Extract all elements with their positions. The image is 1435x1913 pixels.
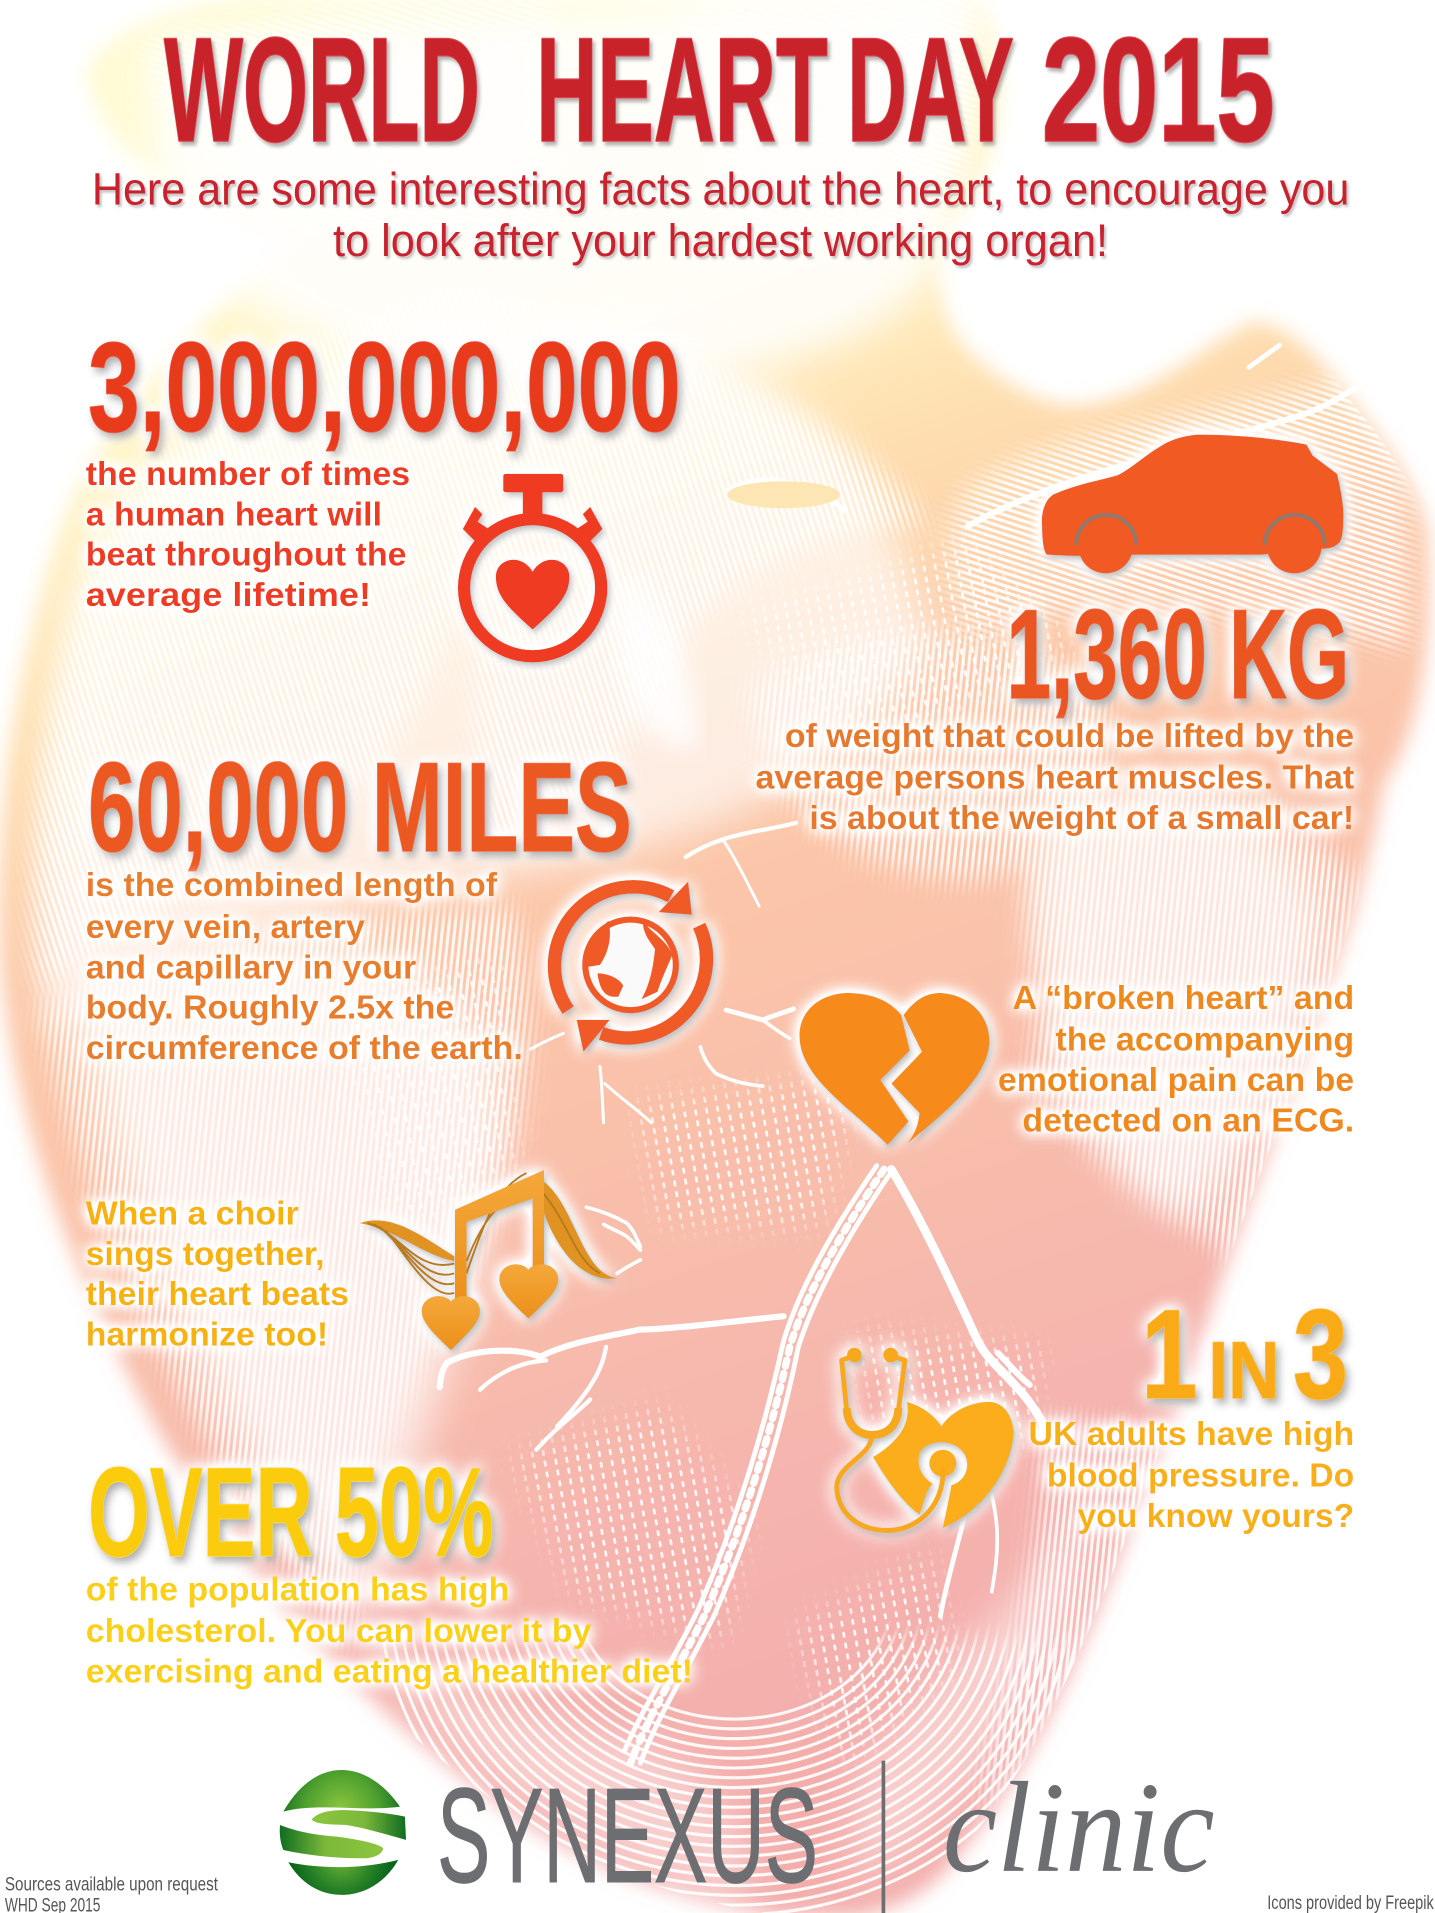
logo: SYNEXUS wordmark: SYNEXUS (437, 1760, 818, 1911)
whitened upper heart (42, 331, 931, 1028)
text: choir: When a choir (86, 1195, 299, 1232)
text: cholesterol: cholesterol. You can lower it by (86, 1613, 592, 1650)
text: veins and arteries: every vein, artery (86, 909, 365, 946)
footnote: sources: Sources available upon request (5, 1873, 218, 1895)
text: broken heart: detected on an ECG. (1022, 1102, 1354, 1139)
text: heart beats: the number of times (86, 456, 410, 493)
text: heart beats: a human heart will (86, 496, 382, 533)
logo: Synexus globe (280, 1770, 406, 1895)
text: broken heart: the accompanying (1055, 1022, 1354, 1059)
apex contour lines (383, 1626, 1087, 1913)
text: choir: harmonize too! (86, 1317, 328, 1354)
text: heart muscles: average persons heart muscles. That (755, 760, 1354, 797)
subtitle: Here are some interesting facts about the heart, to encourage you (92, 163, 1349, 214)
icon: stopwatch with heart (463, 474, 602, 656)
text: cholesterol (86, 1571, 693, 1690)
text: blood pressure: blood pressure. Do (1047, 1457, 1354, 1494)
icon: car (1042, 435, 1343, 573)
title: HEART (536, 8, 828, 173)
title: DAY (847, 8, 1014, 173)
text: cholesterol: of the population has high (86, 1571, 509, 1608)
stat: OVER 50% heading: OVER 50% (88, 1441, 493, 1583)
logo divider (882, 1761, 885, 1913)
text: heart muscles (755, 718, 1354, 837)
stat: 1 in 3 heading: 3 (1293, 1283, 1348, 1425)
text: heart muscles: of weight that could be lifted by the (785, 718, 1354, 755)
text: blood pressure (1028, 1416, 1354, 1535)
text: broken heart: A “broken heart” and (1013, 980, 1354, 1017)
stat: 1 in 3 heading (1141, 1283, 1348, 1425)
text: veins and arteries: body. Roughly 2.5x the (86, 990, 454, 1027)
text: choir: their heart beats (86, 1276, 349, 1313)
title: 2015 (1042, 8, 1275, 173)
stat: 1 in 3 heading: IN (1208, 1326, 1280, 1416)
text: blood pressure: you know yours? (1077, 1498, 1354, 1535)
icon: stethoscope with heart (837, 1348, 1014, 1530)
icon: music notes with hearts (360, 1170, 617, 1350)
title (164, 8, 1275, 173)
text: veins and arteries (86, 867, 523, 1067)
text: heart beats (86, 456, 410, 614)
text: veins and arteries: circumference of the earth. (86, 1030, 523, 1067)
stat: 1 in 3 heading: 1 (1141, 1283, 1197, 1425)
subtitle (92, 163, 1349, 266)
text: veins and arteries: is the combined length of (86, 867, 498, 904)
text: cholesterol: exercising and eating a healthier diet! (86, 1653, 693, 1690)
text: veins and arteries: and capillary in your (86, 949, 416, 986)
stat: 60,000 MILES heading: 60,000 MILES (88, 736, 632, 878)
pale top vessels (153, 0, 980, 381)
icon: broken heart (800, 993, 989, 1145)
text: heart beats: average lifetime! (86, 577, 371, 614)
title: WORLD (164, 8, 480, 173)
icon: globe with circular arrows (554, 882, 706, 1052)
text: heart muscles: is about the weight of a small car! (809, 800, 1354, 837)
text: broken heart (998, 980, 1354, 1139)
text: broken heart: emotional pain can be (998, 1062, 1354, 1099)
text: blood pressure: UK adults have high (1028, 1416, 1354, 1453)
text: heart beats: beat throughout the (86, 537, 407, 574)
stat: 3,000,000,000 heading: 3,000,000,000 (88, 316, 681, 458)
subtitle: to look after your hardest working organ! (333, 215, 1108, 266)
text: choir (86, 1195, 349, 1354)
text: choir: sings together, (86, 1236, 324, 1273)
footnote: sources (5, 1873, 218, 1913)
logo: clinic wordmark: clinic (943, 1756, 1215, 1900)
white vessels (440, 345, 1396, 1763)
